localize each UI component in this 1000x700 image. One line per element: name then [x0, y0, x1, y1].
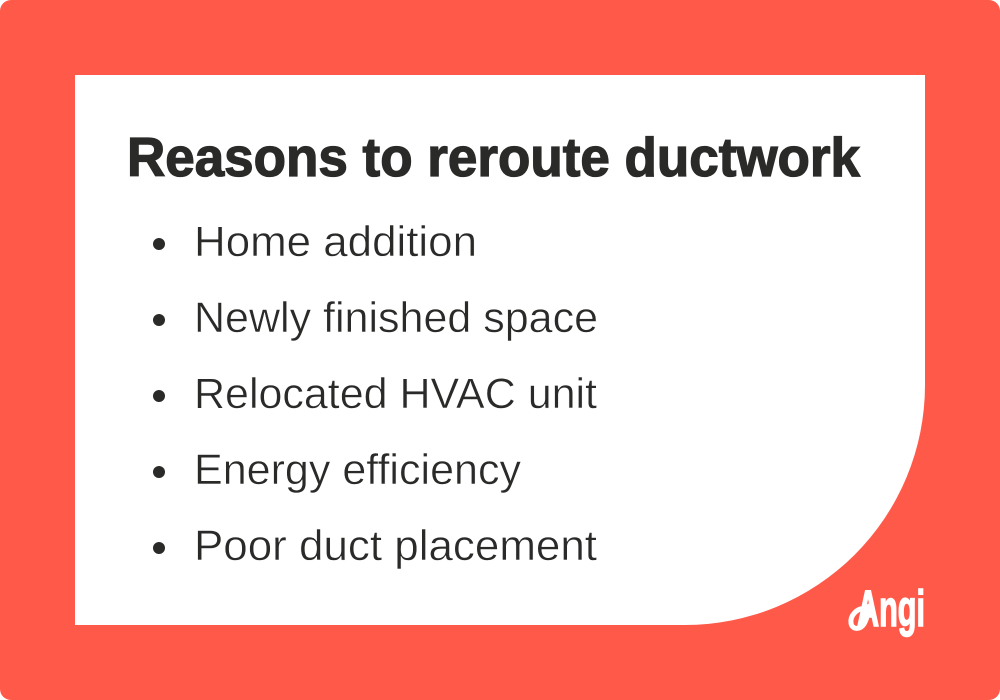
title: Reasons to reroute ductwork — [127, 126, 860, 188]
list item: energy efficiency: Energy efficiency — [194, 446, 521, 494]
list item: home addition: Home addition — [194, 218, 477, 266]
list: reasons — [153, 218, 598, 570]
panel: white content card — [75, 75, 925, 625]
list item: newly finished space: Newly finished space — [194, 294, 598, 342]
list item: poor duct placement: Poor duct placement — [194, 522, 597, 570]
logo: Angi — [851, 580, 925, 637]
logo: Angi: Angi — [857, 580, 925, 637]
list item: relocated HVAC unit: Relocated HVAC unit — [194, 370, 597, 418]
